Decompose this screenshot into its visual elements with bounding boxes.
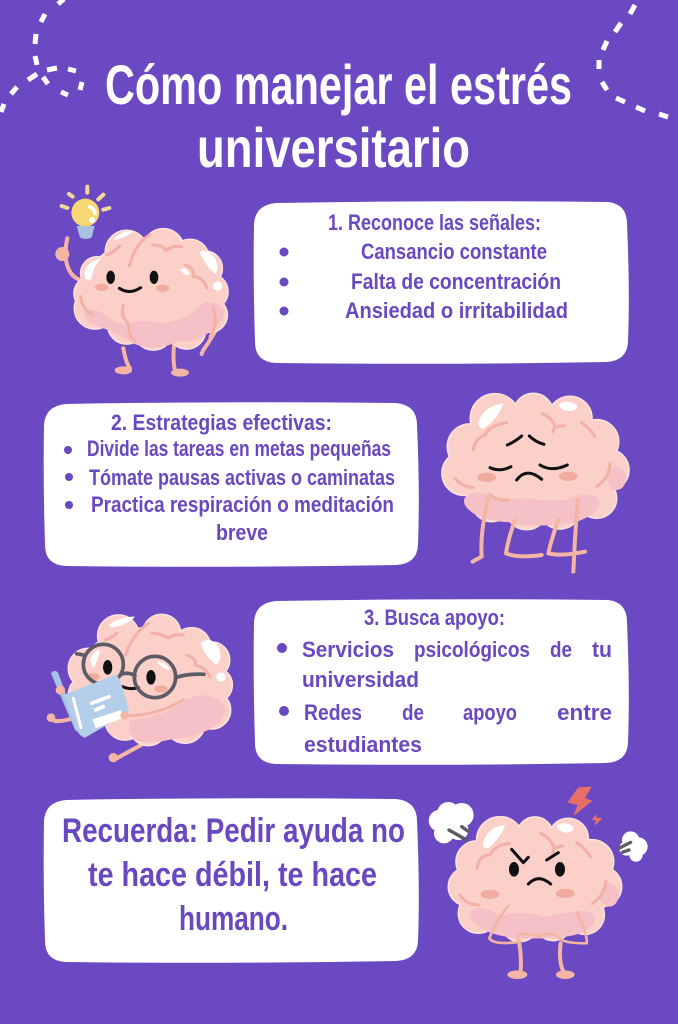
panel: recuerda (44, 798, 419, 963)
panel: busca apoyo: estudiantes (304, 732, 422, 757)
panel: busca apoyo: universidad (302, 667, 419, 692)
illustration: happy brain with light bulb (55, 187, 227, 377)
panel: busca apoyo: Servicios (302, 637, 394, 662)
panel: busca apoyo: de (402, 700, 424, 725)
panel: estrategias efectivas: Tómate pausas activas o caminatas (89, 465, 395, 490)
panel: reconoce las señales: Cansancio constante (361, 239, 547, 264)
panel: busca apoyo (254, 599, 629, 765)
panel: busca apoyo: apoyo (463, 700, 517, 725)
illustration: sad brain (443, 394, 628, 572)
panel: busca apoyo: Redes (304, 700, 362, 725)
illustration: angry brain with steam and lightning (429, 787, 648, 979)
panel: estrategias efectivas: Practica respiración o meditación (91, 492, 394, 517)
panel: busca apoyo: entre (557, 700, 612, 725)
panel: busca apoyo: de (550, 637, 572, 662)
panel: reconoce las señales: Falta de concentración (351, 269, 561, 294)
panel: busca apoyo: tu (592, 637, 612, 662)
panel: estrategias efectivas: Divide las tareas en metas pequeñas (87, 436, 391, 461)
panel: busca apoyo: 3. Busca apoyo: (364, 605, 505, 630)
panel: recuerda: Recuerda: Pedir ayuda no (62, 812, 405, 850)
panel: estrategias efectivas: 2. Estrategias efectivas: (111, 410, 332, 435)
panel: recuerda: te hace débil, te hace (88, 856, 377, 894)
panel: reconoce las señales (254, 201, 629, 364)
panel: estrategias efectivas: breve (216, 520, 268, 545)
title (105, 53, 572, 179)
panel: estrategias efectivas (44, 402, 419, 567)
panel: busca apoyo: psicológicos (414, 637, 530, 662)
illustration: brain reading with glasses (47, 615, 232, 762)
panel: reconoce las señales: Ansiedad o irritabilidad (345, 298, 568, 323)
panel: reconoce las señales: 1. Reconoce las señales: (328, 210, 541, 235)
title: universitario (197, 116, 470, 179)
panel: recuerda: humano. (179, 900, 288, 938)
